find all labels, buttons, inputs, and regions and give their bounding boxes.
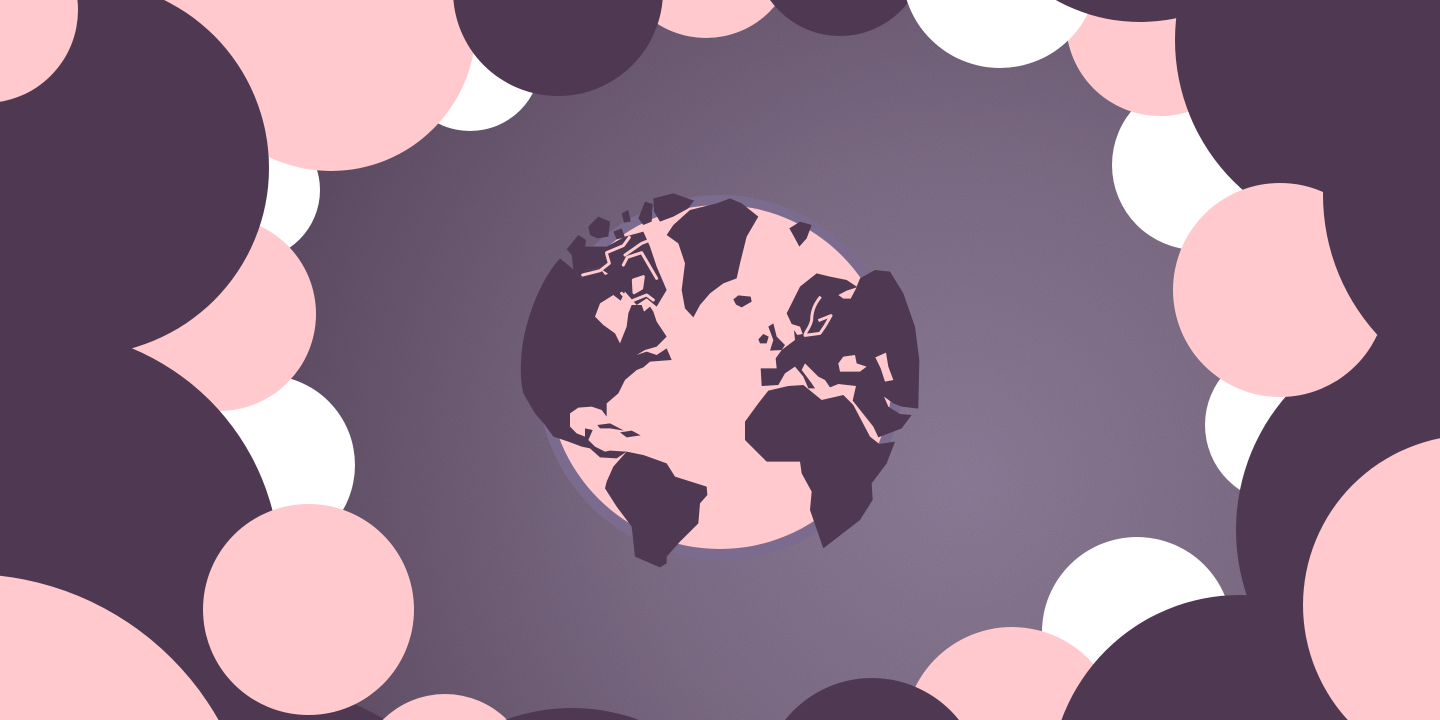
Svalbard	[789, 222, 812, 247]
pink bubble	[1303, 435, 1440, 720]
pink bubble	[357, 694, 533, 720]
globe halo ring	[538, 195, 902, 560]
Africa	[745, 385, 895, 548]
dark bubble	[0, 0, 269, 355]
white bubble	[175, 375, 355, 555]
dark bubble	[1050, 595, 1430, 720]
pink bubble	[0, 574, 256, 720]
Arctic channels	[583, 237, 657, 302]
Black Sea	[838, 355, 867, 372]
South America	[605, 452, 707, 567]
North America	[521, 258, 672, 458]
pink bubble	[1173, 183, 1387, 397]
pink bubble	[122, 217, 316, 411]
pink bubble	[0, 0, 78, 103]
bubbles: left	[0, 330, 494, 720]
dark bubble	[1175, 0, 1440, 240]
pink bubble filler behind dark	[150, 0, 330, 110]
dark bubble	[379, 708, 765, 720]
white bubble	[902, 0, 1098, 68]
dark bubble	[453, 0, 663, 96]
bubbles: top left	[0, 0, 796, 555]
pink bubble	[186, 0, 476, 171]
globe ocean	[548, 205, 892, 549]
Caspian Sea	[875, 353, 893, 382]
Iceland	[733, 295, 752, 307]
pink bubble	[1066, 0, 1254, 116]
white bubble	[1112, 80, 1282, 250]
dark bubble	[1236, 326, 1440, 720]
white bubble	[1205, 347, 1361, 503]
Baltic Sea	[805, 297, 831, 335]
globe	[521, 193, 919, 567]
Britain and Ireland	[758, 323, 785, 351]
dark bubble	[1323, 0, 1440, 402]
White Sea	[838, 287, 857, 299]
dark bubble	[36, 686, 494, 720]
dark bubble	[754, 0, 926, 36]
pink bubble	[904, 627, 1120, 720]
pink bubble	[616, 0, 796, 38]
bubbles: bottom	[357, 537, 1232, 720]
white bubble	[1042, 537, 1232, 720]
Caribbean islands	[597, 423, 641, 437]
dark bubble	[968, 0, 1312, 22]
Arctic islands	[567, 193, 694, 255]
bubbles: top	[754, 0, 1312, 250]
white bubble	[180, 120, 320, 260]
bubbles: right	[1050, 0, 1440, 720]
pink bubble	[203, 504, 414, 715]
Europe and Asia	[761, 270, 919, 437]
Canadian Arctic mass	[572, 232, 667, 307]
continents	[521, 193, 919, 567]
Greenland	[667, 198, 758, 317]
dark bubble	[0, 330, 280, 720]
inland seas	[805, 287, 893, 382]
white bubble	[399, 0, 541, 131]
dark bubble	[761, 678, 983, 720]
